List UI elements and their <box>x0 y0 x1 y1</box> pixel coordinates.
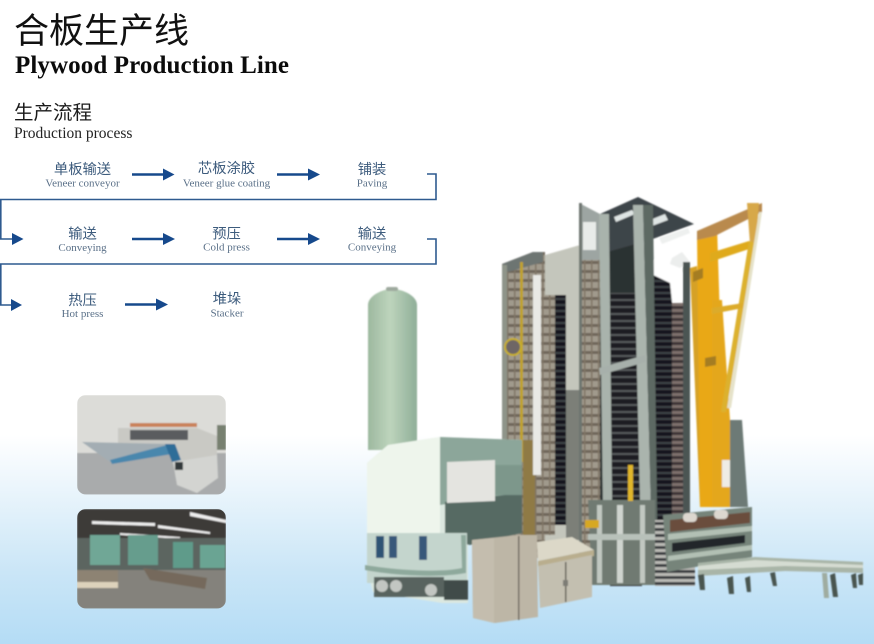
machine: yellow stacker frame <box>690 203 762 507</box>
connector: second row to third row <box>1 239 436 311</box>
step: cold press <box>203 226 250 254</box>
step: paving <box>357 161 388 190</box>
photo: factory workshop <box>77 509 226 609</box>
machine: lower press frame <box>585 465 695 586</box>
section heading: production process: 生产流程 <box>14 102 92 124</box>
machine: central press platens <box>582 225 687 586</box>
step: stacker <box>211 290 244 320</box>
step: conveying <box>58 226 107 254</box>
arrow <box>132 233 175 245</box>
step: veneer glue coating: Veneer glue coating <box>183 178 271 190</box>
step: conveying: Conveying <box>58 242 107 254</box>
illustration: plywood hot press line <box>365 197 863 623</box>
step: hot press: 热压 <box>68 292 97 309</box>
step: cold press: 预压 <box>212 226 241 242</box>
arrow <box>132 168 174 180</box>
step: conveying: 输送 <box>358 226 386 242</box>
step: veneer conveyor: Veneer conveyor <box>45 178 120 190</box>
step: paving: 铺装 <box>358 161 386 178</box>
machine: green vertical tank <box>368 287 417 450</box>
step: veneer conveyor: 单板输送 <box>54 161 111 178</box>
machine: control desk <box>537 537 594 608</box>
arrow <box>277 168 320 180</box>
machine: outfeed conveyor <box>698 557 863 598</box>
step: cold press: Cold press <box>203 242 250 254</box>
process flow diagram <box>1 160 436 320</box>
arrow <box>277 233 320 245</box>
step: paving: Paving <box>357 178 388 190</box>
step: conveying <box>348 226 397 254</box>
title: Plywood Production Line <box>15 52 289 79</box>
section heading: production process: Production process <box>14 125 132 142</box>
step: conveying: 输送 <box>68 226 97 242</box>
step: stacker: Stacker <box>211 308 244 320</box>
machine: left heating column <box>502 245 583 558</box>
photo: veneer glue coating machine <box>77 395 226 495</box>
title: 合板生产线 <box>14 12 189 51</box>
step: conveying: Conveying <box>348 242 397 254</box>
step: hot press: Hot press <box>62 308 103 320</box>
arrow <box>125 298 168 310</box>
title <box>14 12 289 79</box>
step: veneer conveyor <box>45 161 120 190</box>
machine: electrical cabinet <box>472 535 538 623</box>
step: hot press <box>62 292 103 320</box>
machine: upper frame and columns <box>579 197 694 585</box>
connector: first row to second row <box>1 174 436 245</box>
step: stacker: 堆垛 <box>213 290 241 308</box>
section heading: production process <box>14 102 132 142</box>
machine: roller table <box>663 507 752 572</box>
step: veneer glue coating <box>183 160 271 190</box>
machine: oil tank housing <box>365 437 522 603</box>
step: veneer glue coating: 芯板涂胶 <box>198 160 255 177</box>
